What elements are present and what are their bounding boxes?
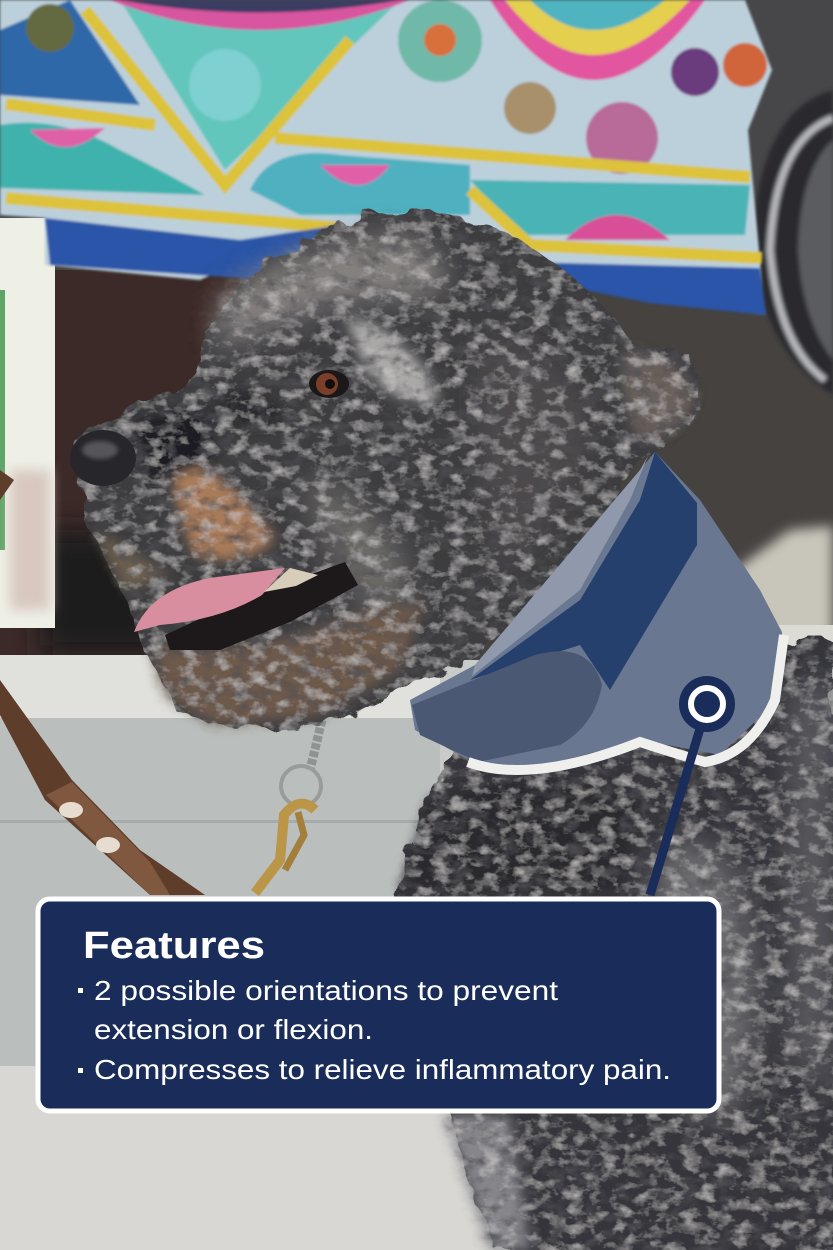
bullet list: extension or flexion. bbox=[94, 1014, 373, 1045]
callout: features bbox=[38, 899, 719, 1111]
nose bbox=[70, 430, 136, 486]
eye bbox=[309, 370, 349, 398]
chain and brass clip bbox=[255, 720, 322, 893]
callout box bbox=[38, 899, 719, 1111]
dog head bbox=[70, 212, 700, 730]
heading: Features bbox=[83, 925, 265, 967]
mouth bbox=[165, 562, 358, 650]
bullet list bbox=[78, 975, 671, 1085]
bullet list: Compresses to relieve inflammatory pain. bbox=[94, 1054, 671, 1085]
tongue bbox=[134, 568, 285, 632]
head fur bbox=[75, 212, 700, 730]
neck brace collar bbox=[410, 452, 784, 772]
bullet list: 2 possible orientations to prevent bbox=[94, 975, 558, 1006]
poster in shop window bbox=[0, 218, 55, 628]
leash bbox=[0, 470, 205, 895]
teeth bbox=[264, 568, 318, 592]
tapestry bbox=[0, 0, 772, 315]
pin marker with leader line bbox=[650, 676, 735, 895]
car wheel bbox=[752, 90, 833, 395]
dog body bbox=[395, 640, 833, 1250]
